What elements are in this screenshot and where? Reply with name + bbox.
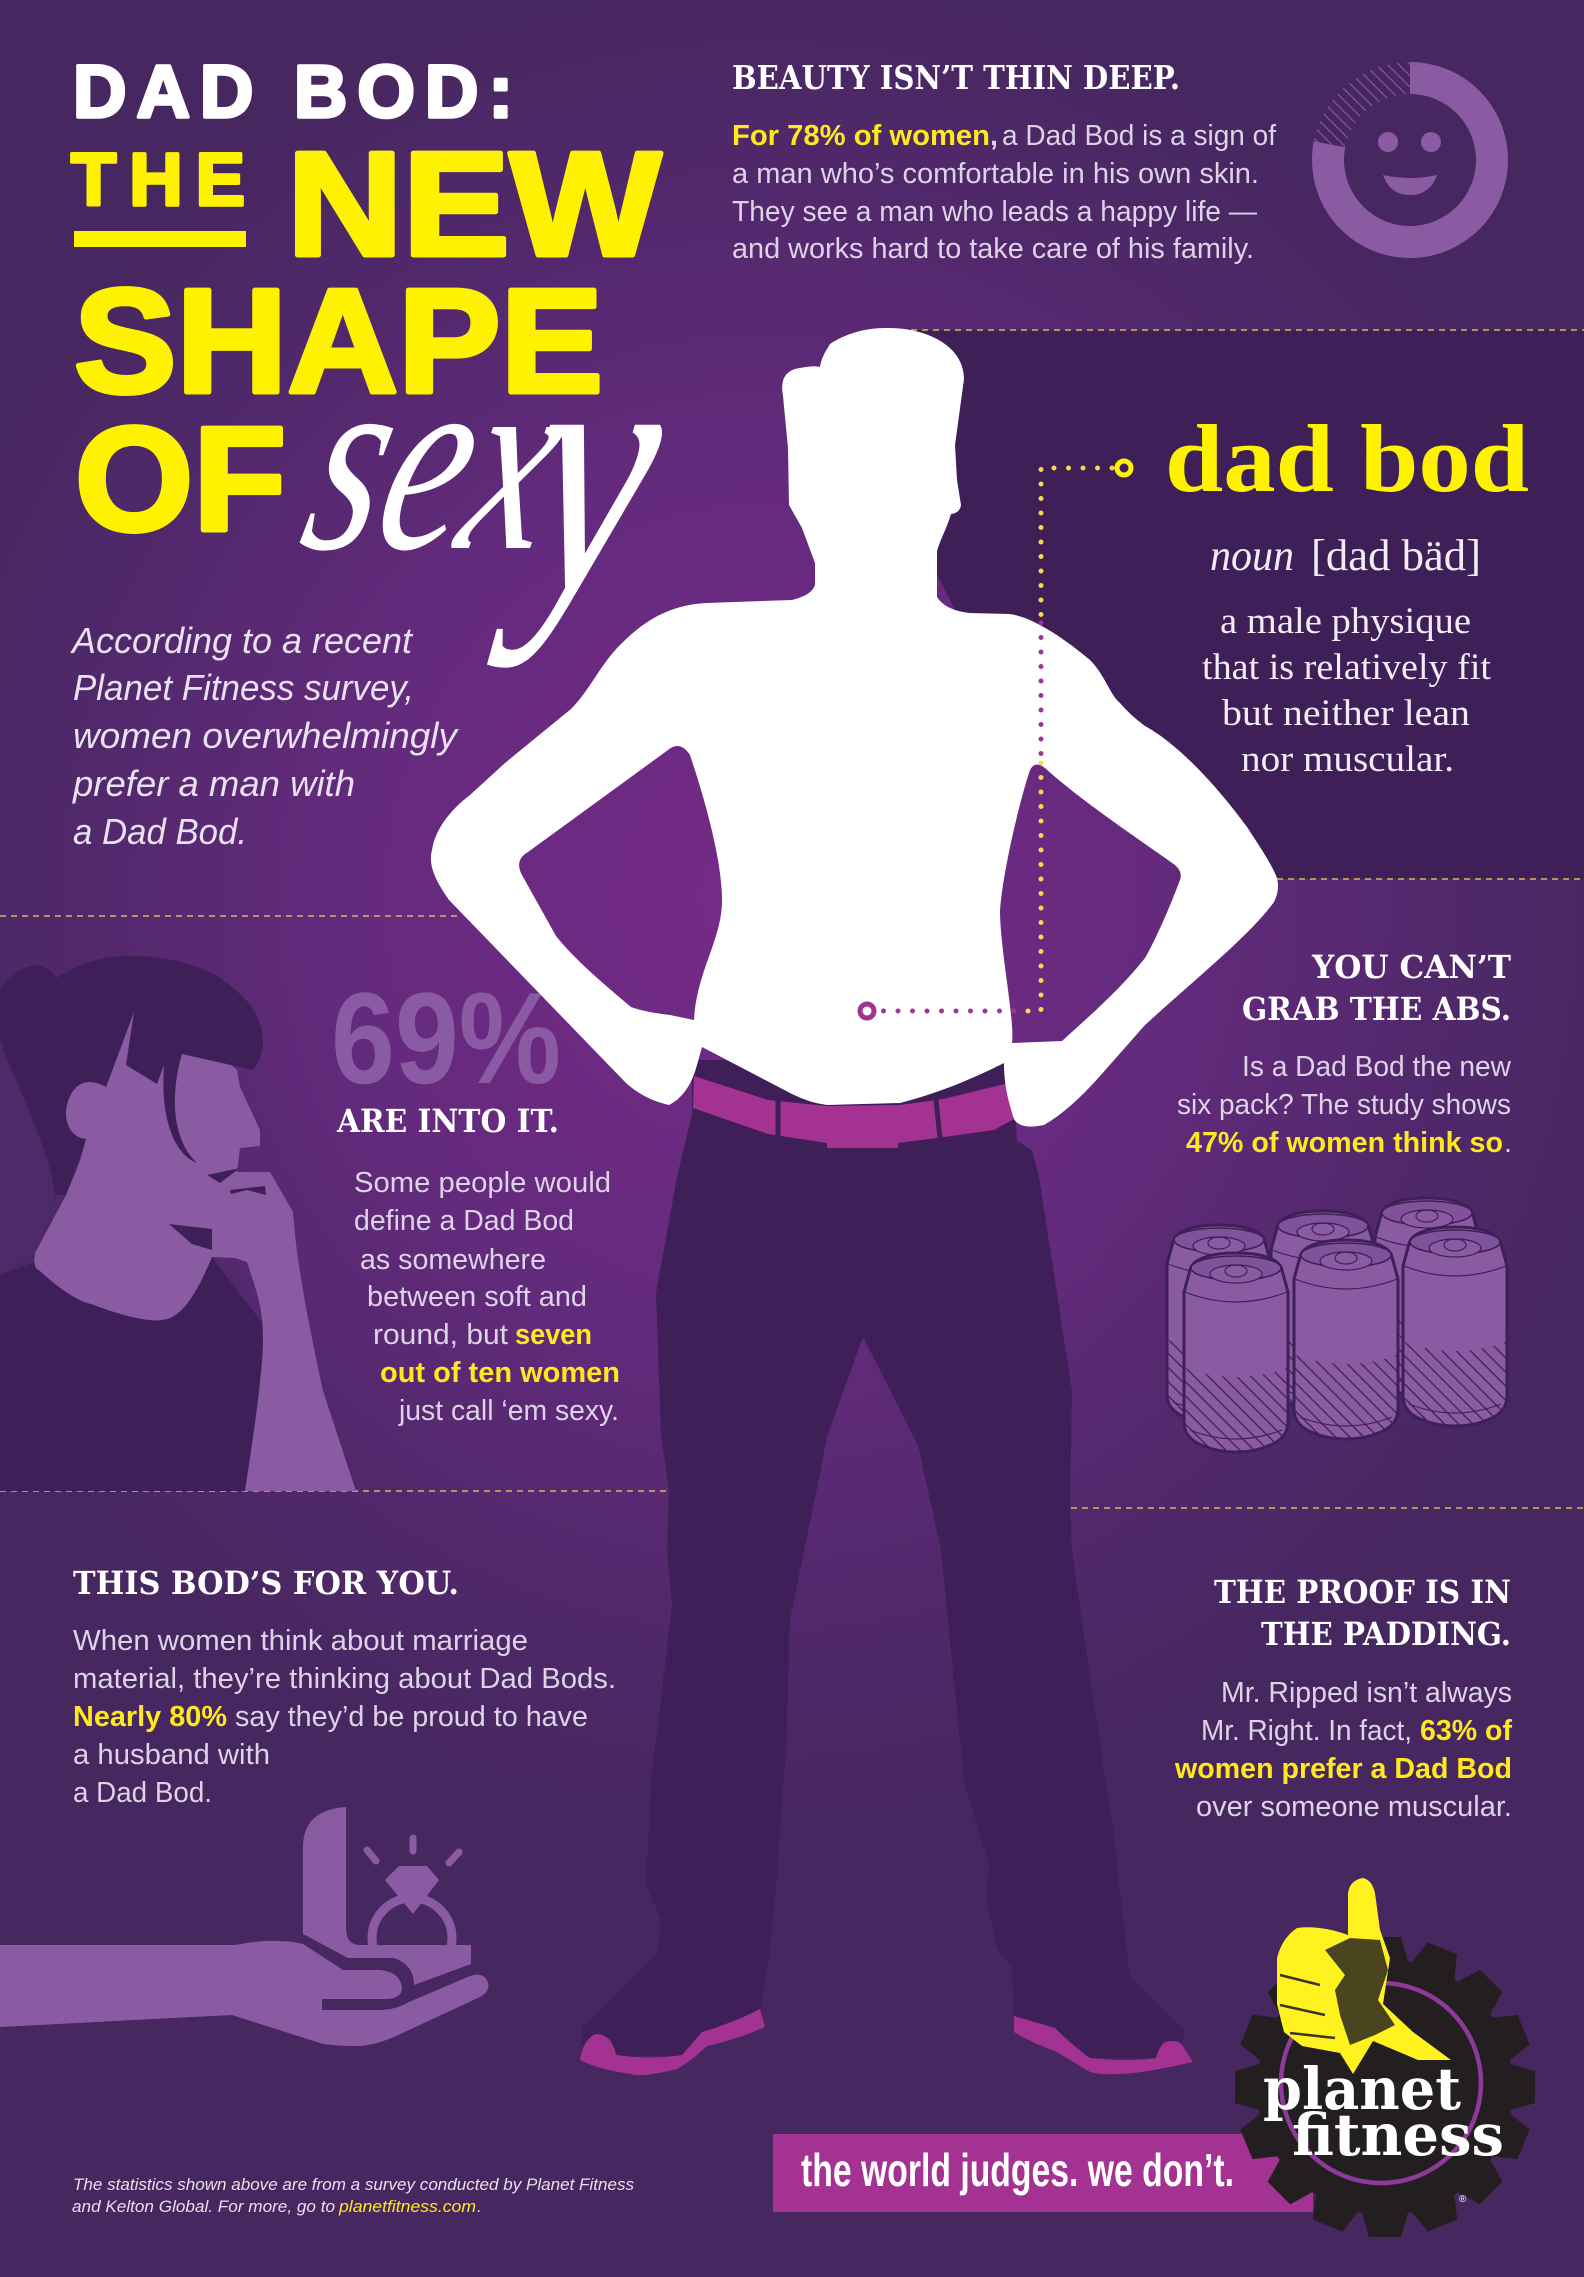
body copy: between soft and	[367, 1281, 587, 1313]
trousers and shoes	[581, 1060, 1186, 2058]
title	[71, 50, 687, 669]
wordmark: planet	[1263, 2055, 1461, 2123]
body copy: a Dad Bod is a sign of	[1002, 120, 1276, 152]
face and arm	[34, 1012, 356, 1491]
section: beauty isn't thin deep	[732, 58, 1276, 265]
title word: the: THE	[71, 138, 245, 221]
intro text: According to a recent	[70, 620, 414, 661]
stat: 69 percent: 69%	[331, 965, 561, 1111]
intro text: prefer a man with	[72, 763, 355, 804]
heading: GRAB THE ABS.	[1242, 990, 1511, 1028]
part of speech and pronunciation: noun	[1210, 531, 1294, 580]
footnote: planetfitness.com	[338, 2197, 476, 2216]
body copy: material, they’re thinking about Dad Bods.	[73, 1663, 616, 1695]
tagline banner	[773, 2134, 1313, 2212]
figure: dad bod silhouette	[431, 328, 1278, 2075]
body copy: a husband with	[73, 1739, 270, 1771]
right arm gap	[1000, 764, 1181, 1043]
thumbs up hand	[1277, 1878, 1451, 2074]
heading: THE PADDING.	[1261, 1615, 1511, 1653]
tagline banner: the world judges. we don’t.	[801, 2144, 1234, 2196]
footnote: and Kelton Global. For more, go to	[72, 2197, 335, 2216]
body copy: .	[1504, 1127, 1512, 1159]
left shoe sole	[580, 2009, 765, 2075]
part of speech and pronunciation	[1210, 531, 1481, 580]
body copy	[1177, 1051, 1512, 1159]
connector: dotted line from belly to definition	[860, 461, 1131, 1018]
hair bun and fringe	[0, 956, 263, 1195]
icon: smiley donut 78 percent	[1314, 62, 1492, 242]
heading	[1242, 948, 1511, 1028]
definition term: dad bod	[1165, 405, 1529, 512]
illustration: thinking woman	[0, 956, 356, 1491]
body copy: They see a man who leads a happy life —	[732, 196, 1257, 228]
heading	[1214, 1573, 1511, 1653]
left arm gap	[519, 746, 722, 1020]
ring	[364, 1834, 462, 1945]
intro text: women overwhelmingly	[73, 715, 459, 756]
title line: dad bod: DAD BOD:	[73, 50, 513, 133]
intro text	[70, 620, 459, 852]
body copy: Mr. Ripped isn’t always	[1221, 1677, 1512, 1709]
footnote	[72, 2175, 634, 2216]
section: the proof is in the padding	[1174, 1573, 1512, 1823]
title word: sexy script: y	[484, 270, 687, 669]
wordmark: fitness	[1292, 2101, 1504, 2169]
mouth and finger lines	[169, 1168, 266, 1250]
wordmark	[1263, 2055, 1504, 2205]
heading: YOU CAN’T	[1311, 948, 1511, 986]
gear	[1235, 1937, 1535, 2237]
title word: of: OF	[75, 397, 286, 562]
intro text: a Dad Bod.	[73, 811, 247, 852]
icon: six pack of cans	[1167, 1198, 1507, 1452]
body copy: as somewhere	[360, 1244, 546, 1276]
body copy: round, but	[373, 1319, 508, 1351]
body copy: For 78% of women	[732, 120, 990, 152]
icon: hand offering ring	[0, 1807, 488, 2046]
title word: sexy script: sex	[282, 314, 594, 606]
body copy: 63% of	[1420, 1715, 1512, 1747]
belt	[693, 1076, 1014, 1148]
body copy: Mr. Right. In fact,	[1201, 1715, 1412, 1747]
body copy	[1174, 1677, 1512, 1823]
intro text: Planet Fitness survey,	[73, 667, 414, 708]
body copy: Some people would	[354, 1167, 611, 1199]
meaning: that is relatively fit	[1202, 647, 1492, 688]
section: are into it	[336, 1102, 620, 1427]
heading: THE PROOF IS IN	[1214, 1573, 1511, 1611]
torso and arms	[431, 328, 1278, 1127]
section: you can't grab the abs	[1177, 948, 1512, 1159]
section: this bod's for you	[73, 1564, 616, 1809]
body copy: Nearly 80%	[73, 1701, 227, 1733]
back hair shade	[0, 1040, 55, 1275]
hand	[0, 1941, 488, 2046]
purple ring	[1281, 1983, 1481, 2183]
body copy: a man who’s comfortable in his own skin.	[732, 158, 1259, 190]
body copy: out of ten women	[380, 1357, 620, 1389]
body copy: six pack? The study shows	[1177, 1089, 1511, 1121]
body copy	[732, 120, 1276, 265]
dark top	[0, 1257, 263, 1491]
body copy: women prefer a Dad Bod	[1174, 1753, 1512, 1785]
heading: ARE INTO IT.	[336, 1102, 559, 1140]
title word: new: NEW	[287, 122, 661, 287]
ring box	[303, 1807, 471, 1985]
body copy: 47% of women think so	[1186, 1127, 1503, 1159]
part of speech and pronunciation: [dad bäd]	[1311, 531, 1481, 580]
body copy: and works hard to take care of his family.	[732, 233, 1254, 265]
body copy: a Dad Bod.	[73, 1777, 212, 1809]
right shoe sole	[1014, 2016, 1193, 2074]
body copy: define a Dad Bod	[354, 1205, 574, 1237]
title word: shape: SHAPE	[74, 259, 603, 424]
panel: dad bod definition backdrop	[900, 330, 1584, 879]
meaning: but neither lean	[1222, 693, 1470, 734]
body copy: Is a Dad Bod the new	[1242, 1051, 1511, 1083]
footnote: The statistics shown above are from a survey conducted by Planet Fitness	[73, 2175, 634, 2194]
footnote: .	[477, 2197, 482, 2216]
logo: planet fitness	[1235, 1878, 1535, 2237]
title underline	[74, 231, 246, 247]
heading: THIS BOD’S FOR YOU.	[73, 1564, 459, 1602]
meaning: nor muscular.	[1241, 739, 1454, 780]
wordmark: ®	[1459, 2194, 1467, 2205]
meaning: a male physique	[1220, 601, 1471, 642]
title word: sexy script	[282, 270, 687, 669]
body copy: seven	[515, 1319, 592, 1351]
body copy	[354, 1167, 620, 1427]
definition: dad bod	[1165, 405, 1529, 780]
body copy: say they’d be proud to have	[235, 1701, 588, 1733]
body copy: ,	[990, 120, 998, 152]
body copy: over someone muscular.	[1196, 1791, 1512, 1823]
body copy: When women think about marriage	[73, 1625, 528, 1657]
heading: BEAUTY ISN’T THIN DEEP.	[732, 58, 1180, 97]
meaning	[1202, 601, 1492, 780]
body copy: just call ‘em sexy.	[398, 1395, 619, 1427]
body copy	[73, 1625, 616, 1809]
